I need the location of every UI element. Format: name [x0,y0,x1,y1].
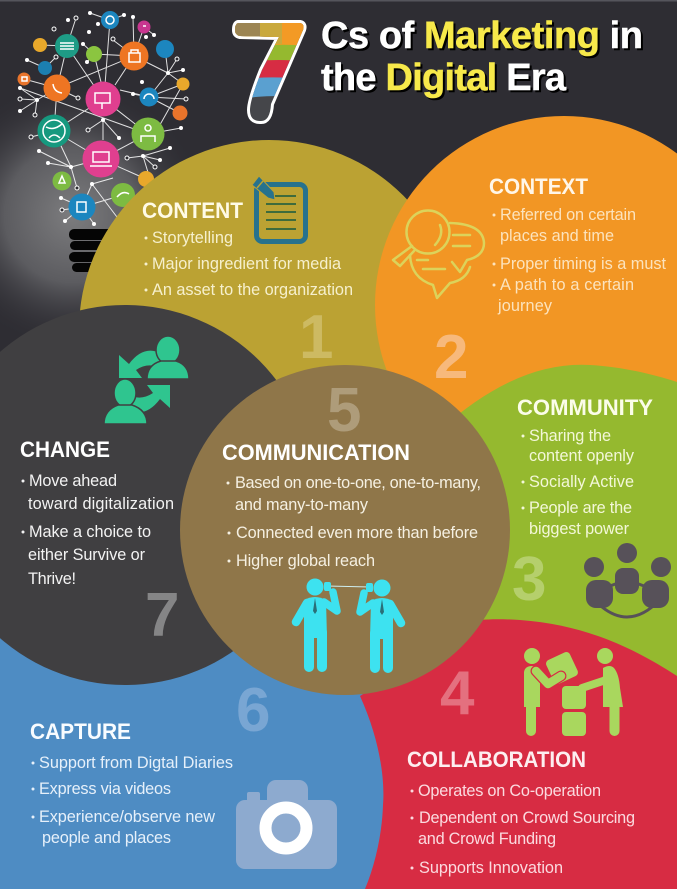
capture text: Experience/observe new [39,808,215,826]
change text: Move ahead [29,472,117,490]
communication text: Based on one-to-one, one-to-many, [235,474,481,492]
title: the Digital Era [321,57,567,99]
panel: collaboration shape [360,619,677,889]
communication text: Higher global reach [236,552,375,570]
communication text: Connected even more than before [236,524,478,542]
context text: places and time [500,227,614,245]
panel: change circle [0,305,315,685]
content text: An asset to the organization [152,281,353,299]
number 2: 2 [434,323,468,392]
community text [517,395,653,538]
title [321,15,645,101]
number 5: 5 [327,376,361,445]
communication text [222,440,481,570]
context text [489,174,666,315]
icon: two men on tin-can phone [296,578,401,668]
icon: camera [236,780,337,869]
collaboration text: COLLABORATION [407,747,586,772]
context text: Proper timing is a must [500,255,666,273]
panel: community shape [440,365,677,700]
title: the Digital Era [323,59,569,101]
change text: Thrive! [28,570,76,588]
context text: CONTEXT [489,174,589,199]
context text: journey [497,297,553,315]
capture text [30,719,233,847]
panel: capture shape [0,630,400,889]
context text: A path to a certain [500,276,634,294]
community text: Socially Active [529,473,634,491]
community text: People are the [529,499,632,517]
icon: community group [584,543,671,617]
collaboration text: Operates on Co-operation [418,782,601,800]
change text: either Survive or [28,546,146,564]
communication text: and many-to-many [235,496,369,514]
change text: CHANGE [20,437,110,462]
community text: COMMUNITY [517,395,653,420]
community text: Sharing the [529,427,611,445]
change text: Make a choice to [29,523,151,541]
change text: toward digitalization [28,495,174,513]
number 4: 4 [440,659,475,728]
title numeral 7 [232,20,307,124]
number 6: 6 [236,676,270,745]
communication text: COMMUNICATION [222,440,410,465]
community text: content openly [529,447,635,465]
collaboration text: Supports Innovation [419,859,563,877]
collaboration text: and Crowd Funding [418,830,556,848]
capture text: CAPTURE [30,719,131,744]
bulb base [69,229,120,272]
icon: magnifier and speech bubbles [393,210,484,298]
content text: CONTENT [142,198,244,223]
capture text: Support from Digtal Diaries [39,754,233,772]
number 7: 7 [145,581,179,650]
lightbulb network icon [18,11,190,272]
collaboration text [407,747,635,877]
community text: biggest power [529,520,630,538]
panel: content circle [79,140,459,520]
content text: Major ingredient for media [152,255,342,273]
number 1: 1 [299,303,333,372]
title: Cs of Marketing in [321,15,643,57]
icon: document and pencil [252,176,306,242]
change text [20,437,174,588]
icon: change people and arrows [104,336,189,424]
context text: Referred on certain [500,206,636,224]
title: Cs of Marketing in [323,17,645,59]
panel: context circle [375,116,677,494]
number 3: 3 [512,545,546,614]
content text: Storytelling [152,229,233,247]
icon: people stacking blocks [524,648,623,736]
content text [142,198,353,299]
panel: communication circle [180,365,510,695]
capture text: people and places [42,829,171,847]
capture text: Express via videos [39,780,171,798]
collaboration text: Dependent on Crowd Sourcing [419,809,635,827]
